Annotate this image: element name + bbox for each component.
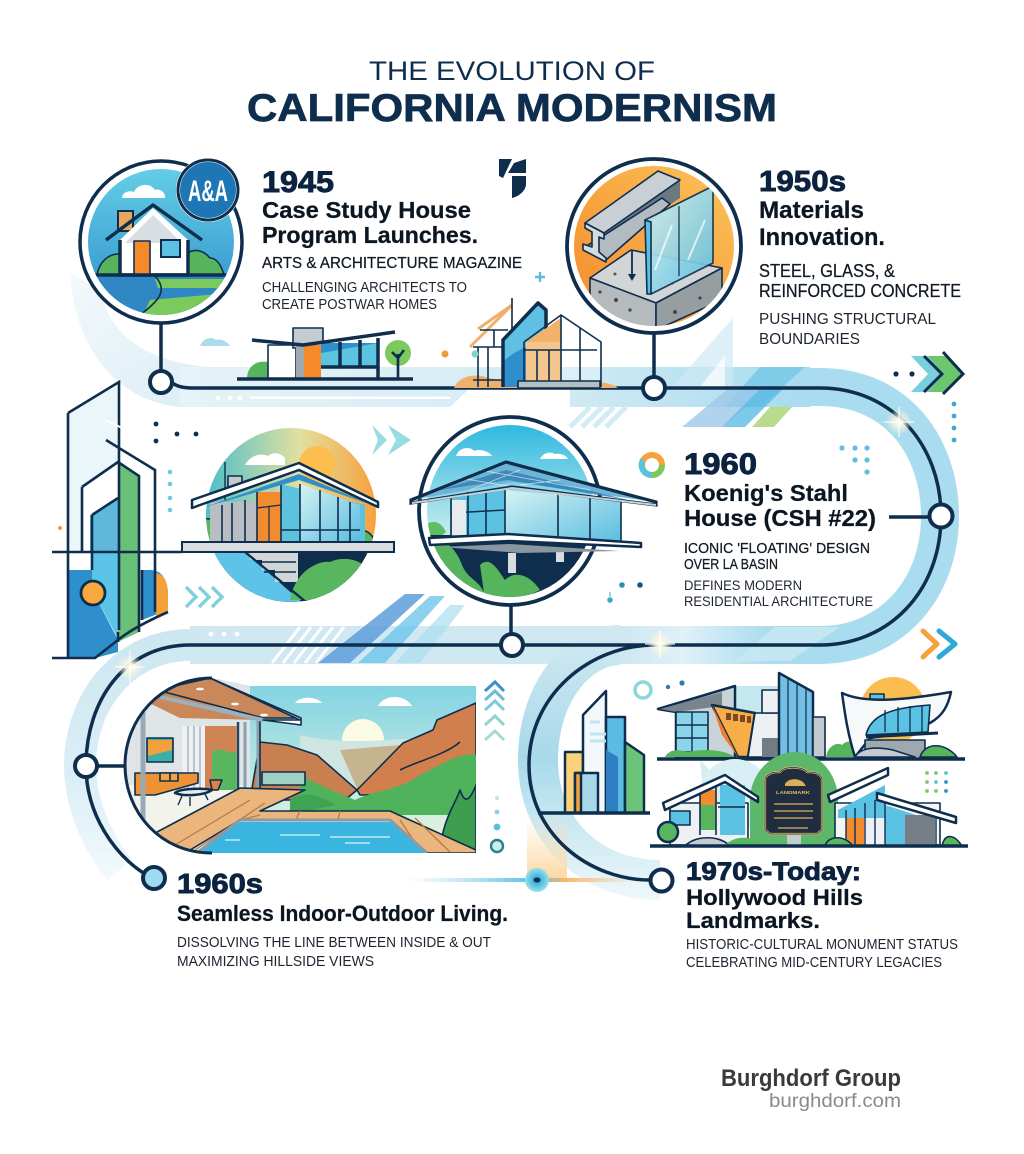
title bbox=[247, 56, 777, 130]
text: 1950s: PUSHING STRUCTURAL bbox=[759, 311, 936, 328]
decorative dots right bbox=[839, 402, 956, 475]
text: 1945: CREATE POSTWAR HOMES bbox=[262, 297, 437, 313]
text: 1950s: REINFORCED CONCRETE bbox=[759, 281, 961, 301]
text: 1945: 1945 bbox=[262, 166, 334, 199]
icon: modern house small bbox=[200, 328, 413, 379]
panel: modernist landmark houses bbox=[635, 673, 968, 846]
flare highlights bbox=[115, 407, 914, 684]
panel: Stahl House circle bbox=[411, 417, 656, 605]
footer brand: burghdorf.com bbox=[769, 1091, 901, 1112]
footer brand: Burghdorf Group bbox=[721, 1065, 901, 1092]
connector and node 1950s bbox=[643, 333, 665, 399]
text: 1950s: BOUNDARIES bbox=[759, 331, 860, 348]
text: 1960: House (CSH #22) bbox=[684, 505, 876, 531]
text: 1950s bbox=[759, 166, 961, 348]
connector and nodes 1960s bbox=[75, 755, 165, 889]
text: 1960s: MAXIMIZING HILLSIDE VIEWS bbox=[177, 953, 374, 970]
decorative stripes and glass accents bbox=[272, 318, 840, 663]
icon: orange blue chevrons bbox=[923, 631, 955, 657]
icon: up chevrons and dots bbox=[485, 682, 504, 852]
text: 1950s: STEEL, GLASS, & bbox=[759, 261, 895, 281]
icon: house under construction bbox=[442, 272, 618, 388]
bottom houses and plaque bbox=[650, 752, 968, 846]
text: 1960s: Seamless Indoor-Outdoor Living. bbox=[177, 901, 508, 926]
text: 1950s: Materials bbox=[759, 197, 864, 224]
text: 1960: Koenig's Stahl bbox=[684, 480, 848, 506]
bottom houses and plaque: LANDMARK bbox=[776, 790, 811, 795]
text: 1945: CHALLENGING ARCHITECTS TO bbox=[262, 280, 467, 296]
text: 1970s-Today: CELEBRATING MID-CENTURY LEGACIES bbox=[686, 955, 942, 971]
text: 1970s-Today: 1970s-Today: bbox=[686, 858, 861, 886]
A&A badge bbox=[178, 160, 238, 220]
text: 1970s-Today: HISTORIC-CULTURAL MONUMENT STATUS bbox=[686, 937, 958, 953]
decorative dots near tower bbox=[58, 422, 411, 607]
connector and node Stahl bbox=[501, 605, 523, 656]
text: 1945: Case Study House bbox=[262, 197, 471, 223]
connector node 1970s bbox=[650, 870, 672, 892]
icon: skyline buildings bbox=[538, 691, 650, 813]
text: 1945 bbox=[262, 166, 522, 313]
icon: glowing dot on line bbox=[525, 868, 549, 892]
connector and node 1945 bbox=[150, 323, 172, 393]
text: 1960s: DISSOLVING THE LINE BETWEEN INSIDE & OUT bbox=[177, 934, 491, 951]
text: 1960: 1960 bbox=[684, 448, 757, 481]
text: 1960 bbox=[684, 448, 876, 609]
timeline ribbon bands bbox=[70, 273, 940, 882]
text: 1960s bbox=[177, 868, 508, 970]
panel: left tower illustration bbox=[52, 382, 182, 658]
icon: donut ring bbox=[642, 455, 662, 475]
panel: 1950s circle illustration bbox=[567, 159, 741, 333]
timeline track bbox=[86, 381, 941, 880]
text: 1970s-Today bbox=[686, 858, 958, 971]
text: 1945: Program Launches. bbox=[262, 222, 478, 248]
text: 1960: RESIDENTIAL ARCHITECTURE bbox=[684, 594, 873, 609]
panel: pool and canyon view bbox=[120, 678, 480, 858]
text: 1950s: Innovation. bbox=[759, 224, 885, 251]
footer brand bbox=[721, 1065, 901, 1112]
icon: chevrons top right bbox=[893, 352, 963, 394]
text: 1945: ARTS & ARCHITECTURE MAGAZINE bbox=[262, 255, 522, 272]
logo mark bbox=[499, 159, 526, 198]
text: 1960: OVER LA BASIN bbox=[684, 557, 778, 573]
decorative dots mid bbox=[607, 582, 643, 603]
top right sail building bbox=[657, 692, 965, 759]
connector and node 1960 bbox=[889, 504, 952, 528]
title: CALIFORNIA MODERNISM bbox=[247, 87, 777, 130]
text: 1970s-Today: Landmarks. bbox=[686, 908, 820, 933]
text: 1950s: 1950s bbox=[759, 166, 846, 198]
top left building bbox=[658, 673, 825, 757]
text: 1960s: 1960s bbox=[177, 868, 263, 899]
text: 1960: DEFINES MODERN bbox=[684, 578, 802, 593]
A&A badge: A&A bbox=[188, 175, 228, 208]
panel: modern house illustration bbox=[182, 428, 394, 605]
text: 1970s-Today: Hollywood Hills bbox=[686, 885, 863, 910]
title: THE EVOLUTION OF bbox=[369, 56, 655, 86]
panel: 1945 circle illustration bbox=[78, 159, 244, 325]
text: 1960: ICONIC 'FLOATING' DESIGN bbox=[684, 541, 870, 557]
